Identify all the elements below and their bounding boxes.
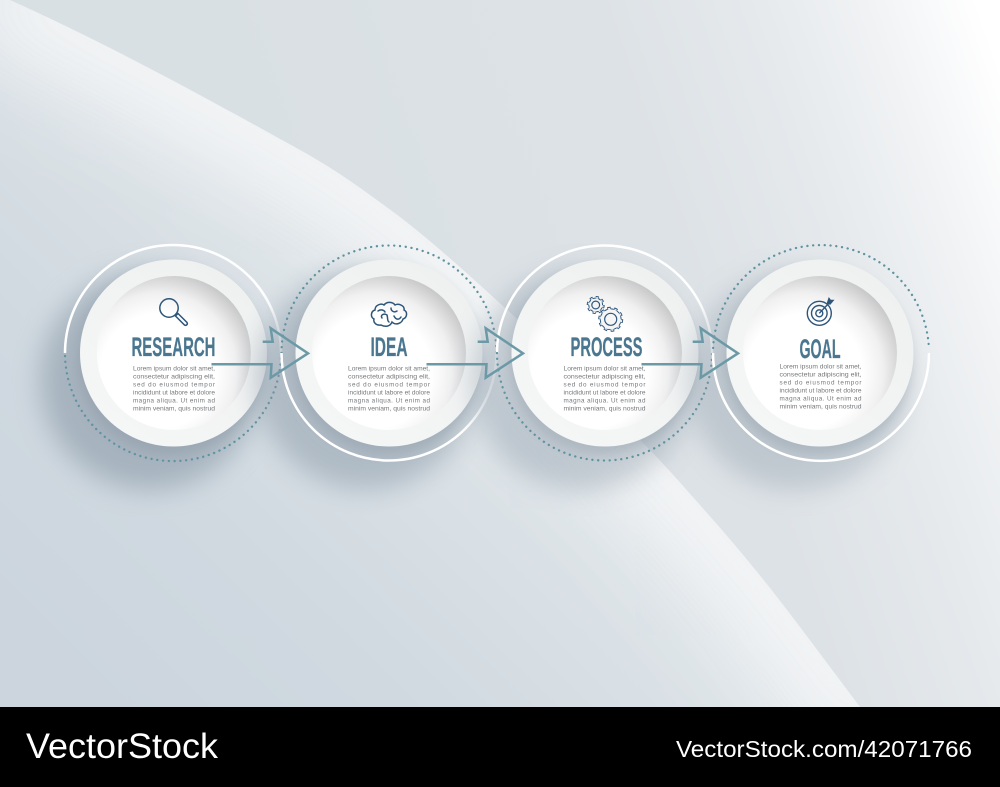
arrow: process to goal xyxy=(642,328,738,378)
body text: incididunt ut labore et dolore xyxy=(564,390,646,396)
footer url: VectorStock.com/42071766 xyxy=(676,736,972,762)
body text: consectetur adipiscing elit, xyxy=(780,372,862,378)
icon: magnifier xyxy=(160,299,187,325)
body text: sed do eiusmod tempor xyxy=(780,380,862,386)
body text: sed do eiusmod tempor xyxy=(133,382,215,388)
body text: sed do eiusmod tempor xyxy=(564,382,646,388)
footer brand: VectorStock xyxy=(26,727,219,766)
body text: consectetur adipiscing elit, xyxy=(564,374,646,380)
body text: minim veniam, quis nostrud xyxy=(780,404,862,410)
step 3: process xyxy=(472,246,712,490)
body text xyxy=(348,366,431,412)
body text xyxy=(564,366,646,412)
body text: magna aliqua. Ut enim ad xyxy=(780,396,862,402)
body text: minim veniam, quis nostrud xyxy=(564,406,646,412)
heading: goal: GOAL xyxy=(800,334,840,364)
disc xyxy=(512,260,698,446)
background swoosh xyxy=(0,0,860,707)
arrow: idea to process xyxy=(426,328,523,378)
body text: consectetur adipiscing elit, xyxy=(348,374,430,380)
body text: minim veniam, quis nostrud xyxy=(348,406,431,412)
disc xyxy=(726,260,914,446)
body text: Lorem ipsum dolor sit amet, xyxy=(780,364,862,370)
dotted ring arc xyxy=(65,356,281,461)
body text: Lorem ipsum dolor sit amet, xyxy=(348,366,430,372)
dotted ring arc xyxy=(713,245,929,348)
body text: incididunt ut labore et dolore xyxy=(348,390,431,396)
body text: magna aliqua. Ut enim ad xyxy=(564,398,646,404)
disc xyxy=(296,260,482,446)
dotted ring arc xyxy=(282,246,496,353)
step 1: research xyxy=(40,245,281,490)
step 2: idea xyxy=(256,246,496,490)
body text: minim veniam, quis nostrud xyxy=(133,406,216,412)
body text: incididunt ut labore et dolore xyxy=(133,390,216,396)
solid ring arc xyxy=(713,353,929,461)
dotted ring arc xyxy=(497,353,712,460)
solid ring arc xyxy=(282,353,496,460)
body text: sed do eiusmod tempor xyxy=(348,382,430,388)
disc xyxy=(80,260,267,446)
body text: magna aliqua. Ut enim ad xyxy=(348,398,430,404)
heading: process: PROCESS xyxy=(570,332,642,362)
heading: idea: IDEA xyxy=(370,332,408,362)
body text: consectetur adipiscing elit, xyxy=(133,374,215,380)
body text xyxy=(133,366,216,412)
icon: gears xyxy=(588,298,622,330)
body text: incididunt ut labore et dolore xyxy=(780,388,862,394)
heading: research: RESEARCH xyxy=(132,332,216,362)
icon: brain xyxy=(371,302,407,326)
step 4: goal xyxy=(688,245,929,490)
icon: target xyxy=(807,298,833,325)
solid ring arc xyxy=(65,245,281,353)
arrow: research to idea xyxy=(212,328,308,378)
body text xyxy=(780,364,862,410)
footer bar xyxy=(0,707,1000,787)
solid ring arc xyxy=(497,246,712,353)
body text: magna aliqua. Ut enim ad xyxy=(133,398,215,404)
body text: Lorem ipsum dolor sit amet, xyxy=(564,366,646,372)
body text: Lorem ipsum dolor sit amet, xyxy=(133,366,215,372)
